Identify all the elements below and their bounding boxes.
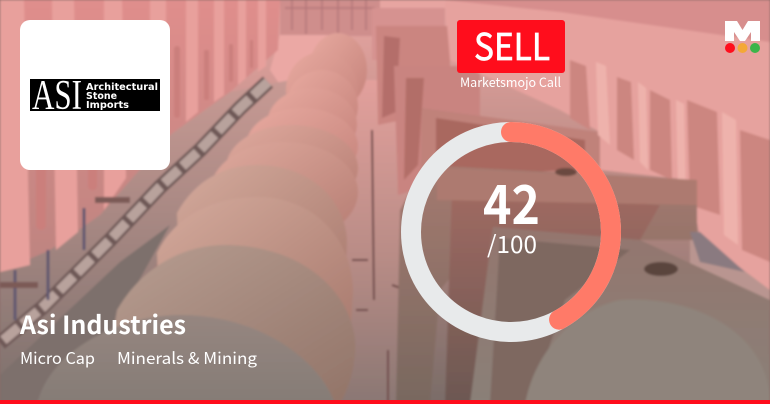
company logo card (20, 20, 170, 170)
large sink behind the ring centre (396, 165, 697, 404)
market cap label: Micro Cap (20, 345, 95, 369)
logo banner: ASI (32, 73, 82, 119)
sector label: Minerals & Mining (117, 345, 257, 369)
logo banner: Stone (86, 91, 117, 102)
right hand moulds (445, 0, 770, 404)
score value: 42 (483, 161, 540, 240)
score ring (411, 132, 611, 332)
strip of floor between domes and moulds (340, 80, 420, 404)
company name: Asi Industries (19, 306, 186, 342)
badge caption: Marketsmojo Call (460, 72, 561, 91)
brand logo (725, 21, 760, 53)
score scale: /100 (487, 225, 537, 260)
logo banner: Architectural (86, 82, 158, 93)
lower left floor (0, 80, 290, 404)
row of clay domes (37, 33, 367, 404)
sell badge: SELL (474, 17, 550, 71)
pipe along the floor (0, 82, 268, 343)
front sink (470, 227, 770, 404)
distant machinery (270, 0, 380, 92)
logo banner (30, 73, 160, 119)
rows of sink moulds (372, 8, 600, 200)
left wall with arches (0, 0, 280, 272)
bottom red bar (0, 400, 770, 404)
logo banner: Imports (86, 100, 129, 111)
